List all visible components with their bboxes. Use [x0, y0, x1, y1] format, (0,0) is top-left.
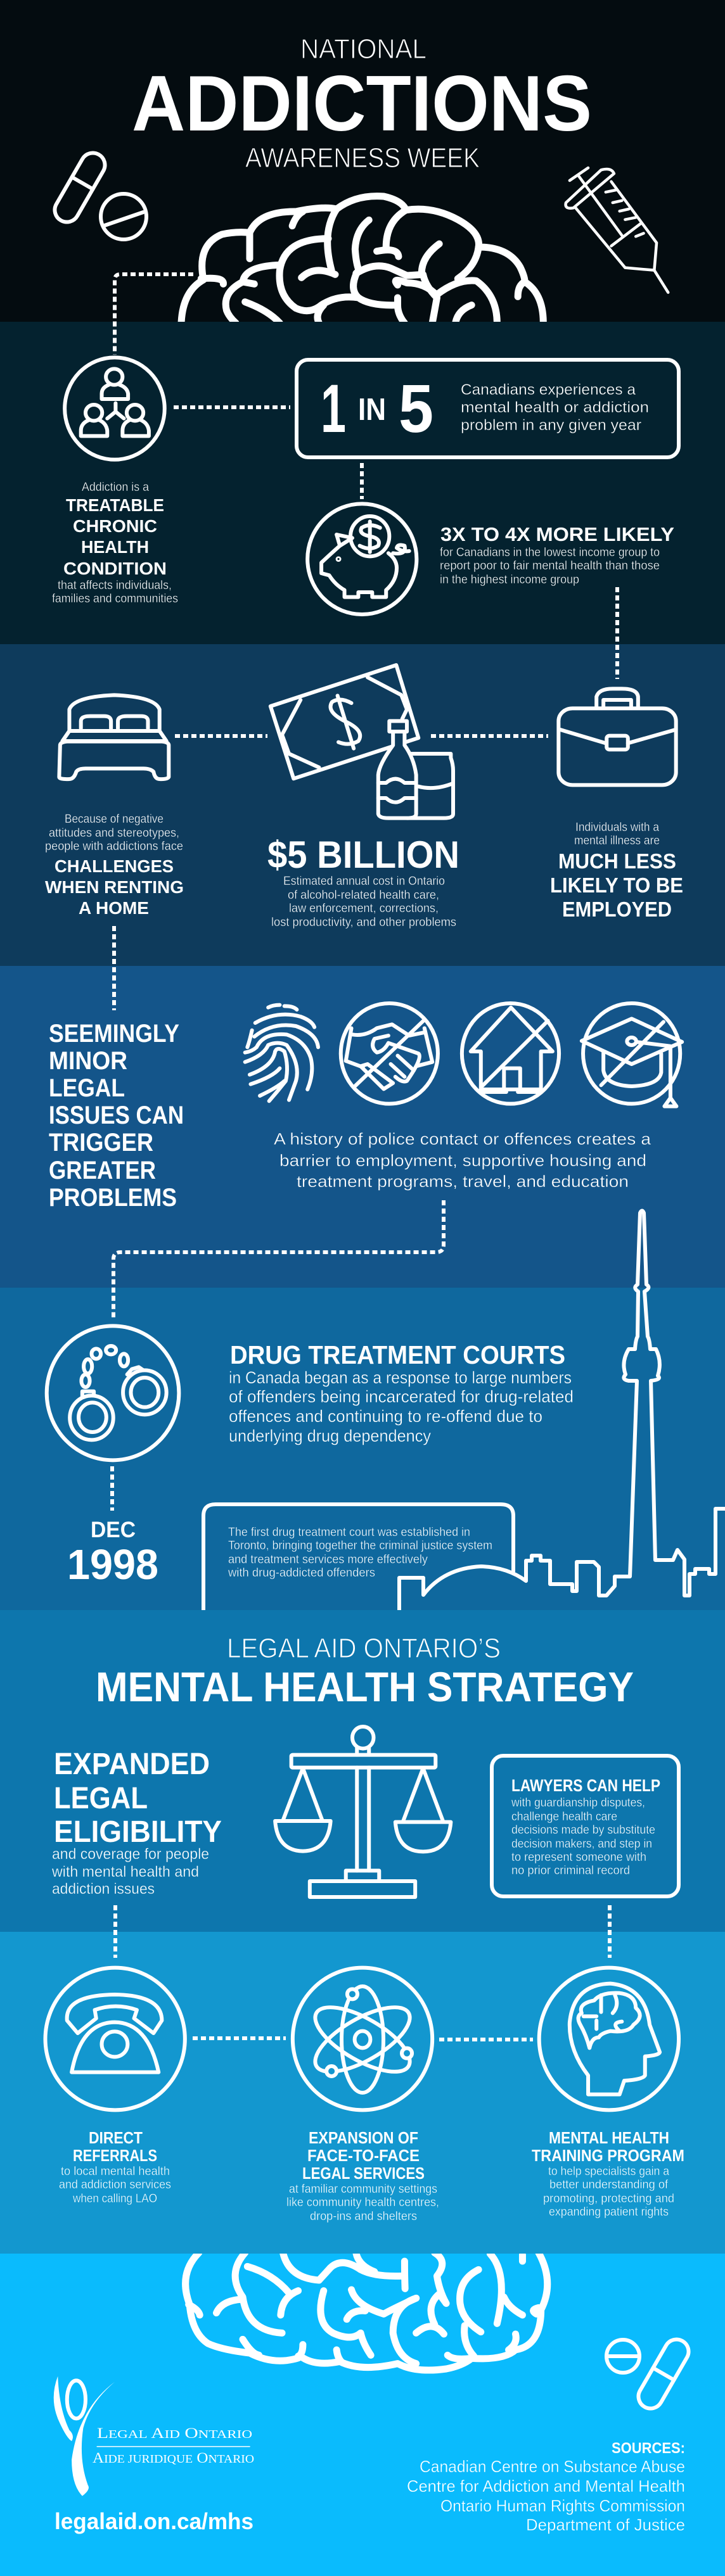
- text: renting challenges: A HOME: [79, 898, 149, 918]
- text: less likely to be employed: Individuals with a: [575, 821, 659, 834]
- arrow: dotted connector 1 in 5 to piggy bank: [360, 463, 364, 499]
- text: face-to-face legal services: [286, 2128, 439, 2223]
- icon: round pill: [101, 194, 146, 239]
- heading: seemingly minor legal issues: GREATER: [49, 1157, 156, 1184]
- text: history of police contact: [274, 1129, 651, 1191]
- panel: statistics: [0, 322, 725, 644]
- text: face-to-face legal services: EXPANSION OF: [309, 2128, 418, 2147]
- text: five billion: Estimated annual cost in Ontario: [283, 875, 445, 888]
- text: drug treatment courts: [229, 1340, 574, 1445]
- text: direct referrals: and addiction services: [59, 2178, 171, 2192]
- icon: fingerprint: [245, 1005, 318, 1101]
- callout: 1 in 5 box: IN: [358, 393, 386, 427]
- icon: banknote and bottles: [271, 665, 453, 818]
- callout: 1 in 5 box: problem in any given year: [461, 417, 641, 434]
- text: sources: [407, 2440, 685, 2534]
- text: mental health training program: expanding patient rights: [549, 2205, 669, 2219]
- text: history of police contact: barrier to employment, supportive housing and: [279, 1151, 646, 1170]
- text: expanded legal eligibility: EXPANDED: [54, 1748, 210, 1781]
- text: face-to-face legal services: like community health centres,: [286, 2196, 439, 2209]
- heading: seemingly minor legal issues: TRIGGER: [49, 1129, 153, 1157]
- arrow: dotted connector brain to people: [115, 274, 193, 355]
- icon: bed: [59, 695, 169, 779]
- arrow: dotted connector lawyers to head: [608, 1905, 612, 1958]
- text: treatable chronic health condition: families and communities: [52, 592, 178, 606]
- text: mental health training program: TRAINING PROGRAM: [532, 2146, 684, 2165]
- icon: syringe: [566, 168, 668, 293]
- heading: seemingly minor legal issues: SEEMINGLY: [49, 1020, 179, 1048]
- arrow: dotted connector people to 1 in 5: [174, 405, 290, 409]
- text: five billion: lost productivity, and other problems: [271, 916, 456, 929]
- text: renting challenges: attitudes and stereotypes,: [49, 827, 179, 840]
- logo: Legal Aid Ontario: [54, 2376, 254, 2496]
- text: 3x to 4x more likely: for Canadians in the lowest income group to: [440, 546, 660, 559]
- text: renting challenges: people with addictions face: [45, 840, 183, 853]
- text: sources: SOURCES:: [612, 2440, 685, 2457]
- panel: services: [0, 1932, 725, 2254]
- text: history of police contact: treatment programs, travel, and education: [297, 1172, 629, 1191]
- heading: Legal Aid Ontario's mental health strategy: MENTAL HEALTH STRATEGY: [96, 1663, 634, 1710]
- icon: handcuffs in circle: [47, 1326, 179, 1460]
- text: five billion: [267, 834, 459, 929]
- text: renting challenges: WHEN RENTING: [45, 877, 184, 897]
- text: treatable chronic health condition: CHRONIC: [73, 516, 157, 536]
- text: december 1998: 1998: [67, 1541, 158, 1589]
- arrow: dotted connector bed to banknote: [175, 734, 267, 738]
- heading: seemingly minor legal issues: ISSUES CAN: [49, 1101, 184, 1129]
- text: drug treatment courts: DRUG TREATMENT COURTS: [230, 1340, 565, 1369]
- heading: seemingly minor legal issues: PROBLEMS: [49, 1184, 177, 1212]
- text: first drug treatment court: The first drug treatment court was established in: [228, 1526, 470, 1539]
- heading: seemingly minor legal issues: [49, 1020, 184, 1212]
- heading: Legal Aid Ontario's mental health strategy: LEGAL AID ONTARIO’S: [227, 1633, 501, 1664]
- text: expanded legal eligibility: addiction issues: [52, 1881, 155, 1898]
- text: sources: Centre for Addiction and Mental Health: [407, 2477, 685, 2496]
- icon: brain lower half: [186, 2253, 548, 2370]
- arrow: dotted connector banknote to briefcase: [431, 734, 548, 738]
- callout: 1 in 5 box: 1: [321, 370, 346, 447]
- text: less likely to be employed: EMPLOYED: [562, 898, 672, 921]
- text: less likely to be employed: LIKELY TO BE: [550, 873, 683, 897]
- text: first drug treatment court: [228, 1526, 492, 1580]
- callout: 1 in 5 box: mental health or addiction: [461, 399, 649, 416]
- panel: drug treatment courts: [0, 1211, 725, 1610]
- illustration: Toronto skyline and CN Tower: [203, 1211, 725, 1610]
- text: first drug treatment court: and treatment services more effectively: [228, 1553, 428, 1566]
- text: treatable chronic health condition: [52, 481, 178, 606]
- text: face-to-face legal services: FACE-TO-FACE: [307, 2146, 420, 2165]
- text: december 1998: [67, 1518, 158, 1589]
- text: five billion: law enforcement, corrections,: [289, 902, 439, 915]
- text: renting challenges: Because of negative: [65, 813, 164, 826]
- text: history of police contact: A history of police contact or offences creates a: [274, 1129, 651, 1148]
- text: treatable chronic health condition: Addiction is a: [82, 481, 149, 494]
- arrow: dotted connector phone to atom: [193, 2036, 286, 2040]
- text: sources: Canadian Centre on Substance Abuse: [420, 2457, 685, 2476]
- text: renting challenges: [45, 813, 184, 918]
- text: direct referrals: DIRECT: [89, 2128, 143, 2147]
- text: face-to-face legal services: drop-ins and shelters: [310, 2210, 417, 2223]
- heading: seemingly minor legal issues: LEGAL: [49, 1074, 125, 1102]
- text: mental health training program: promoting, protecting and: [543, 2192, 674, 2205]
- icon: atom in circle: [293, 1968, 432, 2110]
- arrow: dotted connector history to handcuffs: [113, 1200, 444, 1319]
- text: drug treatment courts: underlying drug dependency: [229, 1426, 431, 1445]
- icon: briefcase: [558, 688, 676, 785]
- text: direct referrals: to local mental health: [61, 2165, 170, 2178]
- icon: people in circle: [65, 357, 165, 460]
- text: treatable chronic health condition: HEALTH: [81, 537, 149, 557]
- icon: round pill: [606, 2340, 639, 2373]
- text: less likely to be employed: mental illness are: [574, 834, 660, 847]
- text: expanded legal eligibility: with mental health and: [51, 1863, 199, 1881]
- arrow: dotted connector atom to head: [439, 2038, 533, 2041]
- text: treatable chronic health condition: TREATABLE: [66, 495, 164, 515]
- title: NATIONAL: [300, 34, 427, 65]
- text: expanded legal eligibility: ELIGIBILITY: [54, 1815, 222, 1849]
- icon: piggy bank in circle: [307, 504, 416, 614]
- icon: capsule pill: [634, 2335, 693, 2413]
- text: 3x to 4x more likely: in the highest income group: [440, 573, 579, 587]
- text: drug treatment courts: of offenders being incarcerated for drug-related: [229, 1387, 574, 1406]
- callout: lawyers can help: decision makers, and step in: [511, 1837, 652, 1851]
- arrow: dotted connector handcuffs to date: [110, 1466, 114, 1511]
- text: 3x to 4x more likely: report poor to fair mental health than those: [440, 559, 660, 573]
- callout: lawyers can help: [492, 1756, 679, 1896]
- logo: Legal Aid Ontario: LEGAL A ID O NTARIO: [97, 2425, 252, 2441]
- callout: 1 in 5 box: 5: [399, 370, 433, 447]
- icon: brain upper half: [181, 196, 543, 323]
- text: face-to-face legal services: LEGAL SERVICES: [302, 2164, 425, 2183]
- callout: lawyers can help: with guardianship disputes,: [511, 1796, 645, 1810]
- text: direct referrals: [59, 2128, 171, 2205]
- callout: lawyers can help: to represent someone with: [511, 1851, 646, 1864]
- text: treatable chronic health condition: CONDITION: [63, 559, 167, 578]
- text: website: legalaid.on.ca/mhs: [55, 2508, 253, 2534]
- text: mental health training program: to help specialists gain a: [548, 2165, 669, 2178]
- text: direct referrals: REFERRALS: [73, 2146, 157, 2165]
- callout: lawyers can help: challenge health care: [511, 1810, 617, 1824]
- text: first drug treatment court: Toronto, bringing together the criminal justice system: [228, 1539, 492, 1552]
- text: less likely to be employed: MUCH LESS: [558, 849, 676, 873]
- text: renting challenges: CHALLENGES: [55, 856, 174, 876]
- text: expanded legal eligibility: LEGAL: [54, 1782, 148, 1815]
- icon: capsule pill: [51, 149, 109, 226]
- arrow: dotted connector eligibility to phone: [113, 1905, 117, 1958]
- text: sources: Department of Justice: [526, 2515, 685, 2534]
- text: first drug treatment court: with drug-addicted offenders: [228, 1566, 375, 1580]
- text: mental health training program: MENTAL HEALTH: [549, 2128, 669, 2147]
- text: mental health training program: better understanding of: [549, 2178, 669, 2192]
- text: sources: Ontario Human Rights Commission: [440, 2496, 685, 2515]
- text: drug treatment courts: offences and continuing to re-offend due to: [229, 1407, 542, 1426]
- text: expanded legal eligibility: and coverage for people: [52, 1846, 209, 1863]
- panel: header: [53, 39, 669, 322]
- text: mental health training program: [532, 2128, 684, 2219]
- panel: footer: [0, 2253, 725, 2576]
- icon: head with brain in circle: [539, 1968, 679, 2110]
- icon: crossed-out house: [462, 1003, 559, 1104]
- text: five billion: of alcohol-related health care,: [288, 889, 439, 902]
- text: 3x to 4x more likely: 3X TO 4X MORE LIKELY: [440, 523, 674, 545]
- text: expanded legal eligibility: [51, 1748, 222, 1898]
- callout: 1 in 5 box: [297, 360, 679, 457]
- arrow: dotted connector likelihood to briefcase: [615, 587, 619, 679]
- arrow: dotted connector renting to legal issues: [112, 926, 116, 1010]
- text: five billion: $5 BILLION: [267, 834, 459, 876]
- panel: legal issues: [0, 966, 725, 1288]
- heading: Legal Aid Ontario's mental health strategy: [96, 1633, 634, 1710]
- icon: scales of justice: [275, 1727, 451, 1897]
- logo: Legal Aid Ontario: AIDE JURIDIQUE ONTARIO: [93, 2450, 254, 2466]
- text: direct referrals: when calling LAO: [72, 2192, 157, 2205]
- icon: telephone in circle: [46, 1968, 185, 2110]
- callout: lawyers can help: decisions made by substitute: [511, 1824, 655, 1837]
- text: less likely to be employed: [550, 821, 683, 921]
- text: face-to-face legal services: at familiar community settings: [289, 2183, 437, 2196]
- callout: 1 in 5 box: Canadians experiences a: [461, 381, 636, 398]
- text: 3x to 4x more likely: [440, 523, 674, 587]
- title: AWARENESS WEEK: [245, 143, 480, 174]
- icon: crossed-out handshake: [341, 1003, 438, 1104]
- callout: lawyers can help: no prior criminal record: [511, 1864, 630, 1877]
- callout: lawyers can help: LAWYERS CAN HELP: [511, 1776, 660, 1795]
- panel: costs and barriers: [0, 644, 725, 966]
- text: treatable chronic health condition: that affects individuals,: [58, 579, 172, 592]
- text: december 1998: DEC: [91, 1518, 136, 1542]
- icon: crossed-out graduation cap: [582, 1003, 682, 1107]
- heading: seemingly minor legal issues: MINOR: [49, 1047, 127, 1075]
- title: ADDICTIONS: [132, 60, 592, 148]
- title: [132, 34, 592, 174]
- panel: mental health strategy: [0, 1610, 725, 1932]
- text: drug treatment courts: in Canada began as a response to large numbers: [229, 1368, 572, 1387]
